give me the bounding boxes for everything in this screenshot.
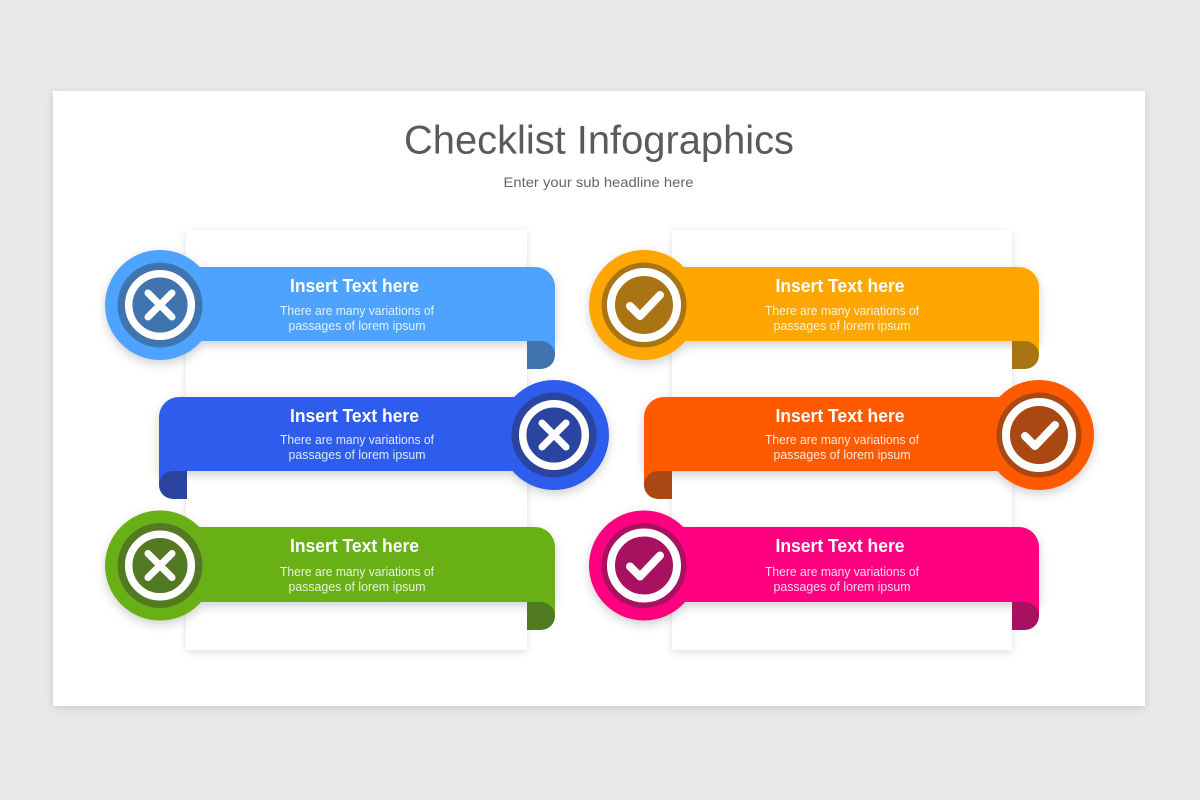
- item: light blue cross: passages of lorem ipsum: [288, 319, 426, 333]
- item: light blue cross: [105, 250, 555, 369]
- item: amber check: passages of lorem ipsum: [774, 319, 910, 333]
- panel: right paper: [672, 230, 1012, 650]
- item: orange check: passages of lorem ipsum: [774, 448, 910, 462]
- item: green cross: There are many variations of: [280, 565, 435, 579]
- item: royal blue cross: [159, 380, 609, 499]
- item: royal blue cross: Insert Text here: [290, 406, 419, 426]
- item: amber check: [589, 250, 1039, 369]
- item: light blue cross: There are many variations of: [280, 304, 435, 318]
- item: orange check: Insert Text here: [776, 406, 904, 426]
- item: light blue cross: Insert Text here: [290, 276, 419, 296]
- item: orange check: There are many variations of: [765, 433, 920, 447]
- item: green cross: passages of lorem ipsum: [288, 580, 426, 594]
- panel: left paper: [186, 230, 527, 650]
- slide panel: [53, 91, 1145, 706]
- item: royal blue cross: passages of lorem ipsum: [288, 448, 426, 462]
- item: amber check: Insert Text here: [776, 276, 904, 296]
- item: amber check: There are many variations of: [765, 304, 920, 318]
- item: green cross: Insert Text here: [290, 536, 419, 556]
- item: pink check: There are many variations of: [765, 565, 920, 579]
- item: green cross: [105, 510, 555, 630]
- item: pink check: [589, 510, 1039, 630]
- title: Checklist Infographics: [404, 118, 794, 162]
- item: pink check: passages of lorem ipsum: [774, 580, 910, 594]
- subtitle: Enter your sub headline here: [504, 174, 694, 190]
- item: orange check: [644, 380, 1094, 499]
- item: royal blue cross: There are many variations of: [280, 433, 435, 447]
- item: pink check: Insert Text here: [776, 536, 904, 556]
